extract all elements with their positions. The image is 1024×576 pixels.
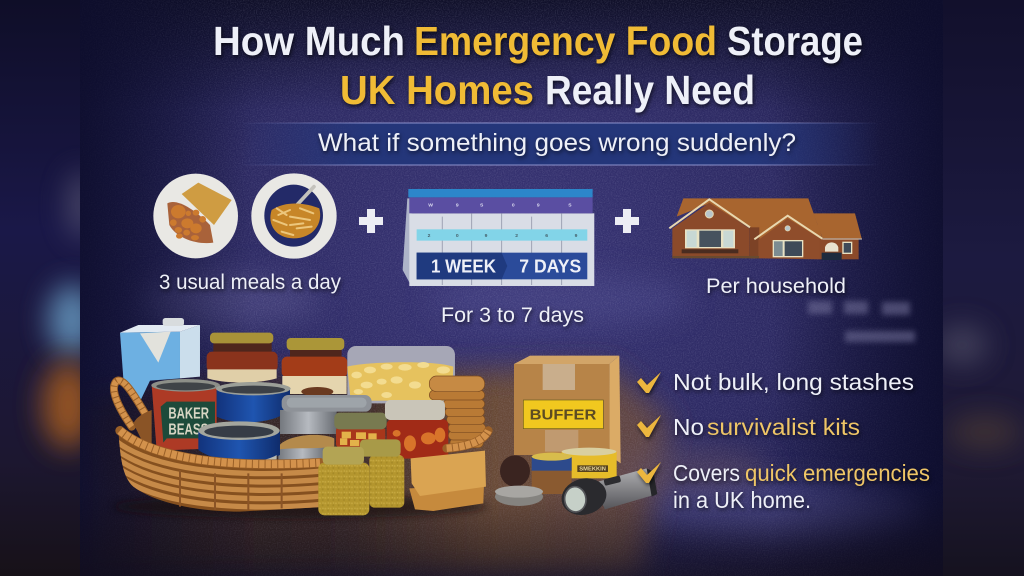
- icon: calendar: 9: [575, 233, 578, 239]
- icon: calendar: S: [568, 203, 572, 209]
- icon: calendar: 9: [537, 203, 540, 209]
- small jars of mustard grain: [318, 439, 404, 515]
- item: no survivalist kits: survivalist kits: [707, 414, 860, 440]
- metal dish: [495, 486, 543, 506]
- icon: calendar: 7 DAYS: [519, 256, 581, 277]
- icon: plate with beans and cracker: [153, 174, 238, 258]
- title: Emergency Food: [414, 18, 717, 64]
- plus sign: [359, 209, 383, 233]
- icon: calendar: 2: [515, 233, 518, 239]
- cardboard box: BUFFER: [530, 407, 597, 423]
- item: covers quick emergencies: [637, 460, 930, 513]
- subtitle band: [240, 122, 880, 166]
- buffer box and emergency items: [495, 356, 657, 520]
- left blurred side panel: [0, 0, 96, 576]
- right blurred side panel: [936, 0, 1024, 576]
- title: Really Need: [545, 67, 755, 113]
- icon: calendar: S: [480, 203, 484, 209]
- label: meals: 3 usual meals a day: [159, 271, 341, 294]
- icon: calendar: 0: [456, 233, 459, 239]
- title: [213, 18, 863, 113]
- dark pot: [500, 455, 530, 487]
- item: no survivalist kits: No: [673, 414, 704, 440]
- icon: calendar: 1 WEEK: [431, 256, 496, 277]
- can: baker beans: BAKER: [168, 405, 209, 422]
- label: days: For 3 to 7 days: [441, 304, 584, 327]
- item: covers quick emergencies: quick emergencies: [745, 460, 930, 486]
- carton: [120, 318, 200, 405]
- icon: calendar: 9: [456, 203, 459, 209]
- can: blue tin: [216, 382, 291, 422]
- icon: calendar: 6: [545, 233, 548, 239]
- cardboard box: [514, 356, 621, 463]
- icon: calendar: 2: [428, 233, 431, 239]
- silver tins: [278, 395, 372, 463]
- title: How Much: [213, 18, 405, 64]
- icon: calendar: [403, 189, 594, 287]
- can: baker beans: [151, 379, 220, 451]
- pasta container: [347, 346, 455, 403]
- crackers: [409, 451, 486, 511]
- jar of sauce: [207, 333, 278, 383]
- food basket group: [113, 318, 488, 518]
- item: no survivalist kits: [637, 414, 860, 440]
- can: baker beans: BEASS: [168, 421, 209, 438]
- can: blue tin front: [198, 421, 280, 463]
- item: covers quick emergencies: Covers: [673, 460, 740, 486]
- woven basket: [114, 381, 488, 512]
- jar of sauce: [282, 338, 347, 396]
- icon: house: [669, 198, 862, 260]
- plus sign: [615, 209, 639, 233]
- jar of peppers: [334, 413, 387, 447]
- item: covers quick emergencies: in a UK home.: [673, 487, 811, 513]
- blue and amber can: [532, 453, 572, 494]
- flashlight: [557, 468, 657, 520]
- icon: calendar: 0: [512, 203, 515, 209]
- item: not bulk: Not bulk, long stashes: [673, 369, 914, 395]
- label: household: Per household: [706, 275, 846, 298]
- yellow can: SMEKKIN: [579, 467, 606, 473]
- title: Storage: [727, 18, 863, 64]
- jar of red fruit: [385, 400, 448, 459]
- icon: calendar: W: [428, 203, 433, 209]
- checklist: [637, 369, 930, 513]
- biscuit stack: [429, 376, 486, 448]
- yellow can: [562, 448, 617, 478]
- title: UK Homes: [340, 67, 534, 113]
- subtitle band: What if something goes wrong suddenly?: [318, 129, 796, 157]
- icon: plate with bowl of pasta: [251, 173, 337, 259]
- icon: calendar: 9: [485, 233, 488, 239]
